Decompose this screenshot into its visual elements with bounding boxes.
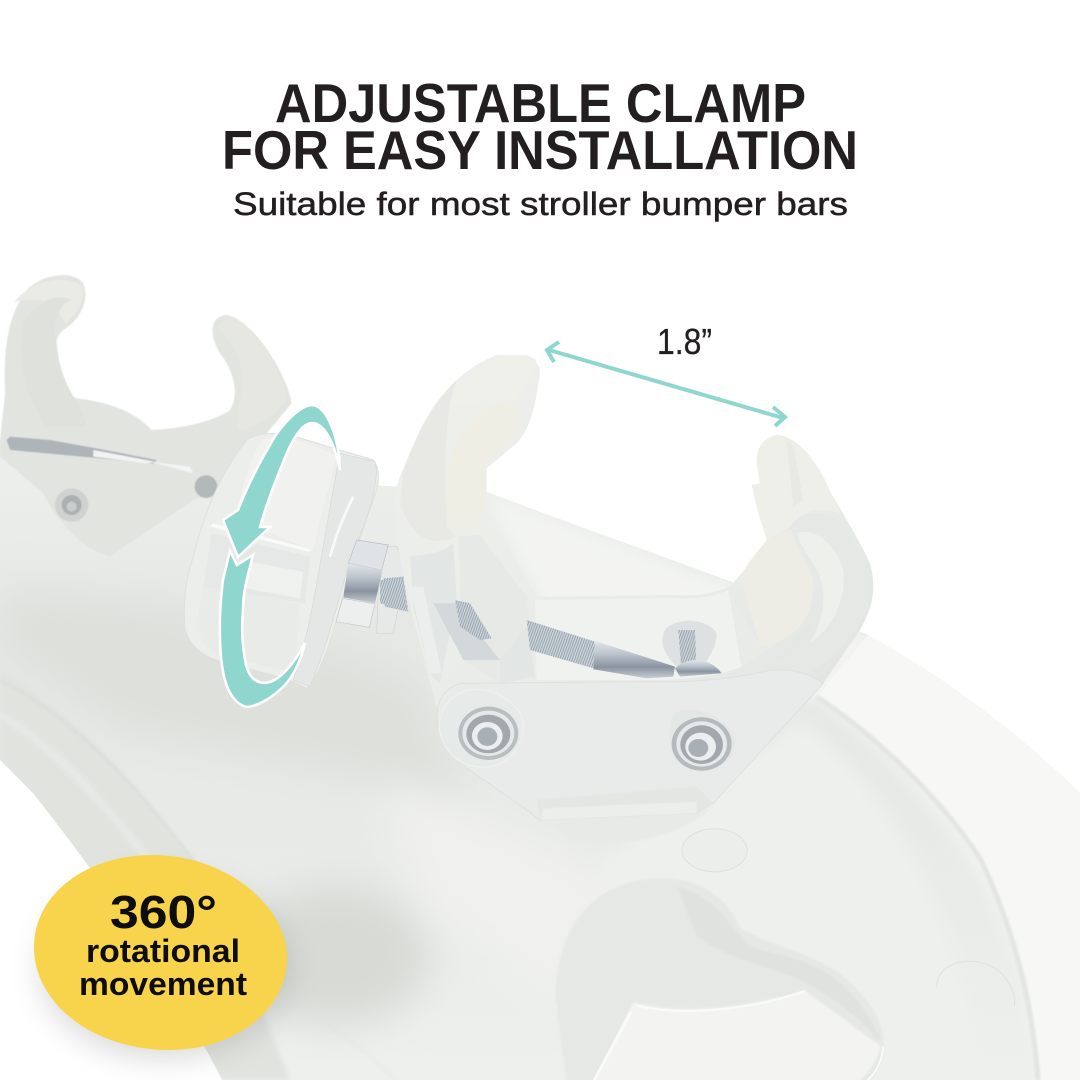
dimension arrow [547, 342, 785, 426]
rivet left [458, 707, 518, 760]
threaded bolt [527, 620, 595, 668]
title: FOR EASY INSTALLATION [222, 119, 858, 181]
soft reflection below plate [527, 807, 713, 844]
subtitle: Suitable for most stroller bumper bars [233, 186, 848, 222]
rear rivet [662, 621, 717, 670]
title: ADJUSTABLE CLAMP [275, 72, 806, 134]
background clamp (out of focus) [0, 275, 292, 557]
rotation arrow: upper sweep [223, 405, 340, 557]
window in plate [535, 590, 742, 680]
main clamp [380, 355, 873, 844]
callout number: 360° [110, 886, 217, 938]
callout line one: rotational [86, 933, 240, 969]
callout: 360 rotational movement [34, 855, 287, 1050]
title [222, 72, 858, 181]
dimension label: 1.8” [657, 321, 712, 362]
callout line two: movement [79, 966, 247, 1002]
jaw highlight left [447, 355, 537, 403]
rotation arrow: lower sweep [220, 551, 305, 707]
clamp jaw body [395, 355, 873, 820]
callout shadow [39, 876, 291, 1060]
rivet right [672, 717, 732, 771]
tray embossed S-shape [556, 829, 1015, 1080]
knob (rotating dial) [184, 433, 379, 688]
clamp hex nut and bolt [336, 540, 408, 633]
lower plate front face [437, 670, 823, 820]
right jaw [752, 435, 840, 540]
tray product photo [0, 430, 1080, 1080]
